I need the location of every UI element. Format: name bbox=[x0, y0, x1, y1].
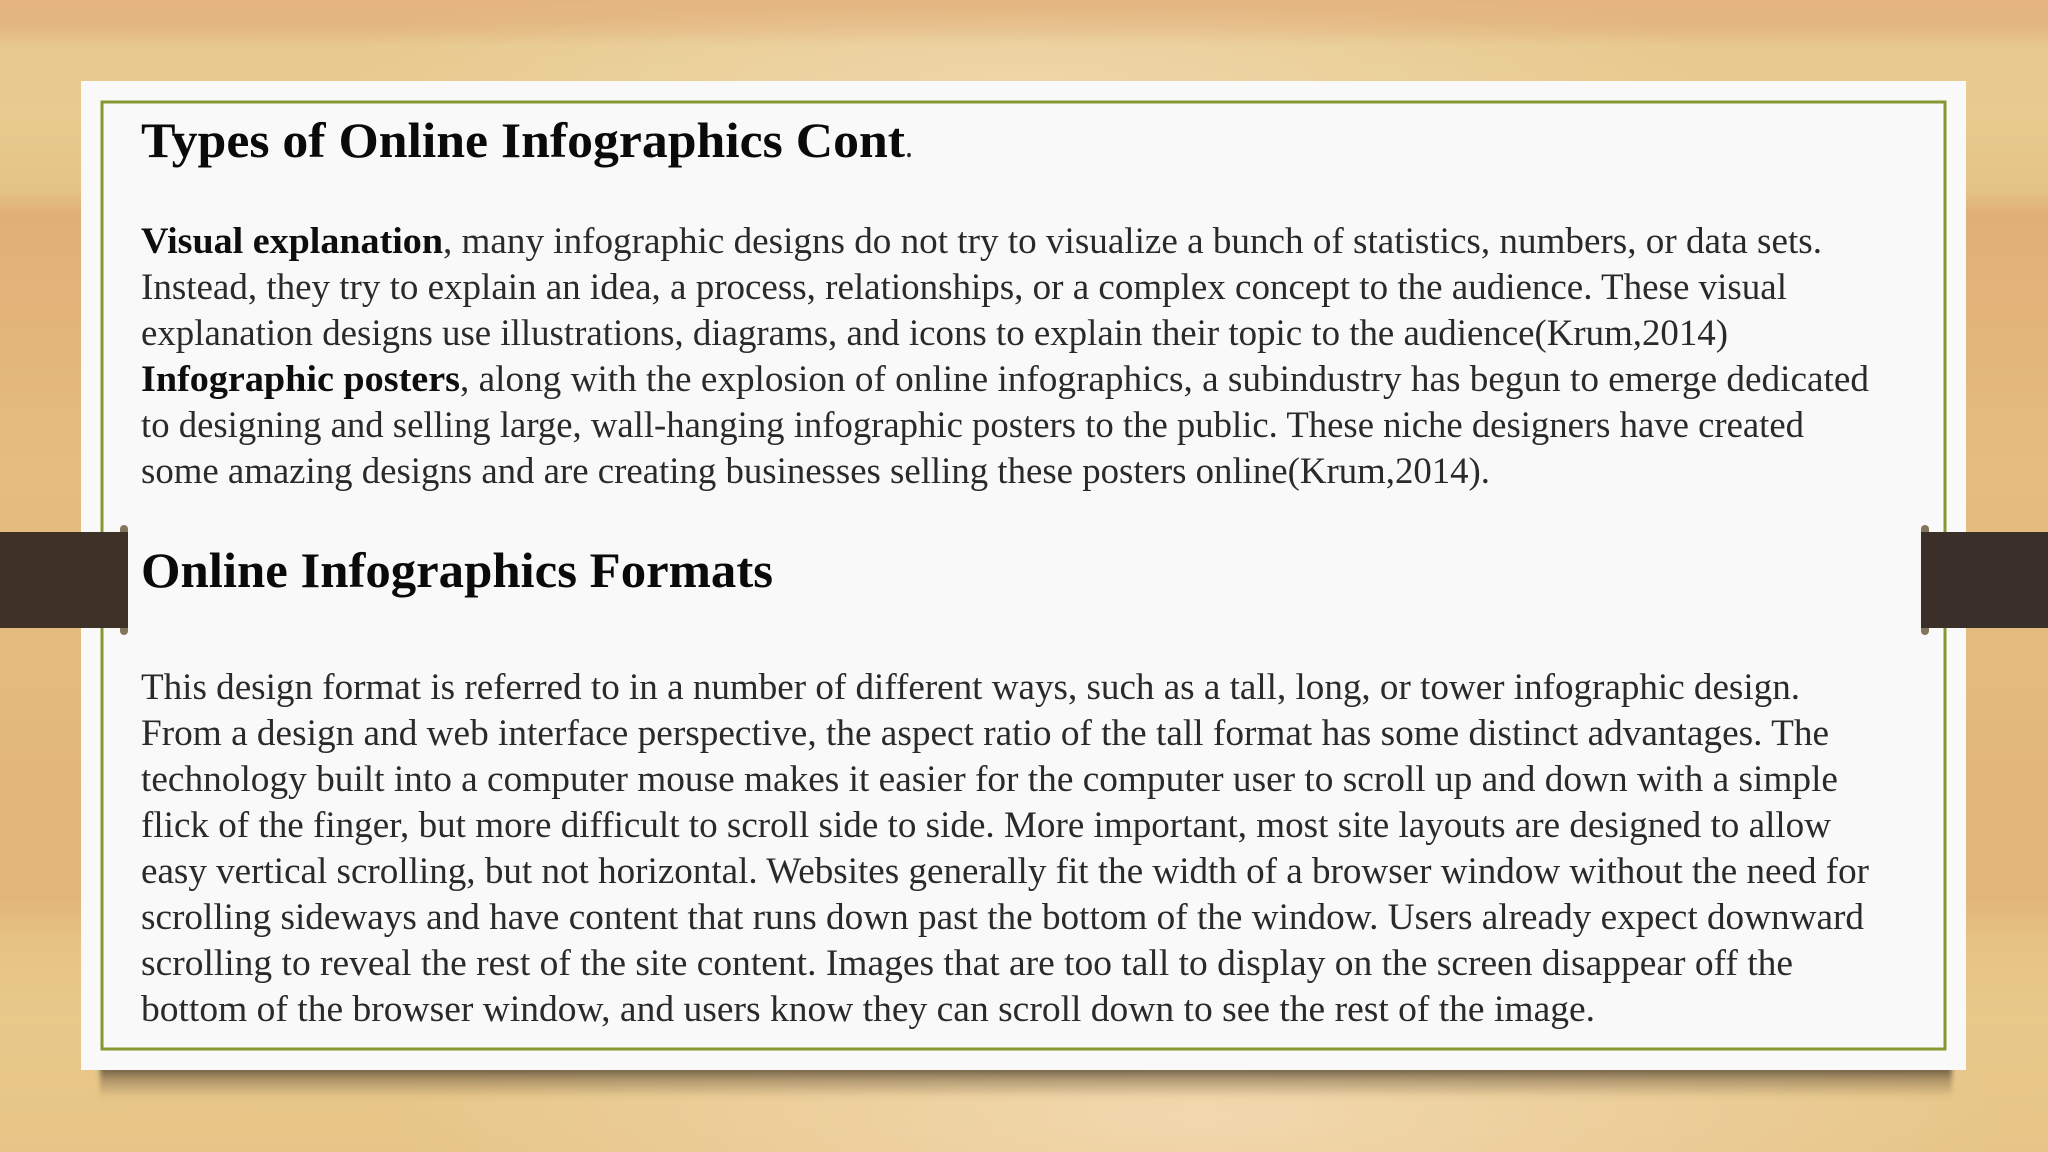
text block: tall format: scrolling to reveal the rest of the site content. Images that are too tall to display on the screen disappear off the bbox=[141, 943, 1793, 984]
card shadow bbox=[100, 1066, 1952, 1098]
text block: tall format bbox=[141, 667, 1869, 1030]
text block: tall format: easy vertical scrolling, but not horizontal. Websites generally fit the width of a browser window without the need for bbox=[141, 851, 1869, 892]
text block: visual explanation and infographic posters: Visual explanation bbox=[141, 221, 443, 262]
text block: visual explanation and infographic posters bbox=[141, 221, 1869, 492]
title: Types of Online Infographics Cont bbox=[141, 112, 905, 168]
text block: visual explanation and infographic posters: to designing and selling large, wall-hanging infographic posters to the public. These niche designers have created bbox=[141, 405, 1804, 446]
white card bbox=[81, 81, 1966, 1070]
text block: visual explanation and infographic posters: , many infographic designs do not try to visualize a bunch of statistics, numbers, or data sets. bbox=[443, 221, 1822, 262]
text block: tall format: scrolling sideways and have content that runs down past the bottom of the window. Users already expect downward bbox=[141, 897, 1865, 938]
left strap bbox=[0, 525, 128, 635]
text block: tall format: bottom of the browser window, and users know they can scroll down to see the rest of the image. bbox=[141, 989, 1595, 1030]
title: . bbox=[905, 125, 913, 166]
text block: tall format: This design format is referred to in a number of different ways, such as a tall, long, or tower infographic design. bbox=[141, 667, 1800, 708]
text block: tall format: technology built into a computer mouse makes it easier for the computer user to scroll up and down with a simple bbox=[141, 759, 1838, 800]
green frame bbox=[102, 102, 1945, 1049]
heading: online infographics formats: Online Infographics Formats bbox=[141, 542, 773, 598]
text block: visual explanation and infographic posters: Infographic posters bbox=[141, 359, 460, 400]
text block: visual explanation and infographic posters: , along with the explosion of online infographics, a subindustry has begun to emerge dedicated bbox=[460, 359, 1869, 400]
text block: tall format: flick of the finger, but more difficult to scroll side to side. More important, most site layouts are designed to allow bbox=[141, 805, 1831, 846]
text block: tall format: From a design and web interface perspective, the aspect ratio of the tall format has some distinct advantages. The bbox=[141, 713, 1829, 754]
text block: visual explanation and infographic posters: explanation designs use illustrations, diagrams, and icons to explain their topic to the audience(Krum,2014) bbox=[141, 313, 1728, 354]
text block: visual explanation and infographic posters: Instead, they try to explain an idea, a process, relationships, or a complex concept to the audience. These visual bbox=[141, 267, 1787, 308]
text block: visual explanation and infographic posters: some amazing designs and are creating businesses selling these posters online(Krum,2014). bbox=[141, 451, 1490, 492]
right strap bbox=[1921, 525, 2048, 635]
